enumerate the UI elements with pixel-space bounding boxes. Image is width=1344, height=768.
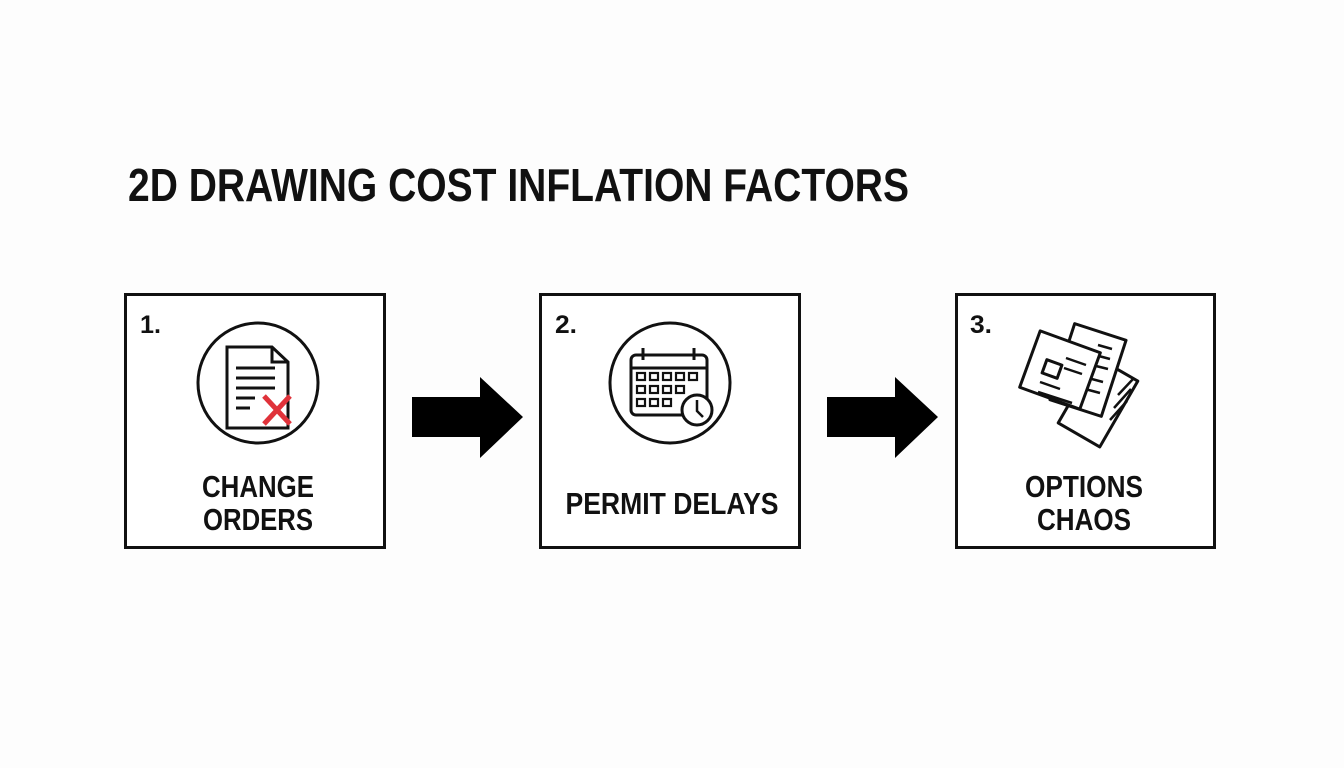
- title: 2D DRAWING COST INFLATION FACTORS: [128, 159, 909, 211]
- panel: options chaos: CHAOS: [1037, 502, 1131, 537]
- panel: permit delays: [540, 294, 800, 548]
- panel: change orders: [126, 294, 384, 548]
- label: options chaos: OPTIONS: [1025, 469, 1143, 504]
- panel: change orders: ORDERS: [203, 502, 313, 537]
- arrow 2: [827, 377, 938, 458]
- number 3: 3.: [970, 311, 992, 339]
- panel: options chaos: [956, 294, 1214, 548]
- label: permit delays: PERMIT DELAYS: [566, 486, 778, 521]
- icon: document with red x: [198, 323, 318, 443]
- label: change orders: CHANGE: [202, 469, 314, 504]
- icon: scattered papers: [1020, 324, 1138, 447]
- arrow 1: [412, 377, 523, 458]
- number 1: 1.: [140, 311, 161, 339]
- number 2: 2.: [555, 311, 577, 339]
- icon: calendar with clock: [610, 323, 730, 443]
